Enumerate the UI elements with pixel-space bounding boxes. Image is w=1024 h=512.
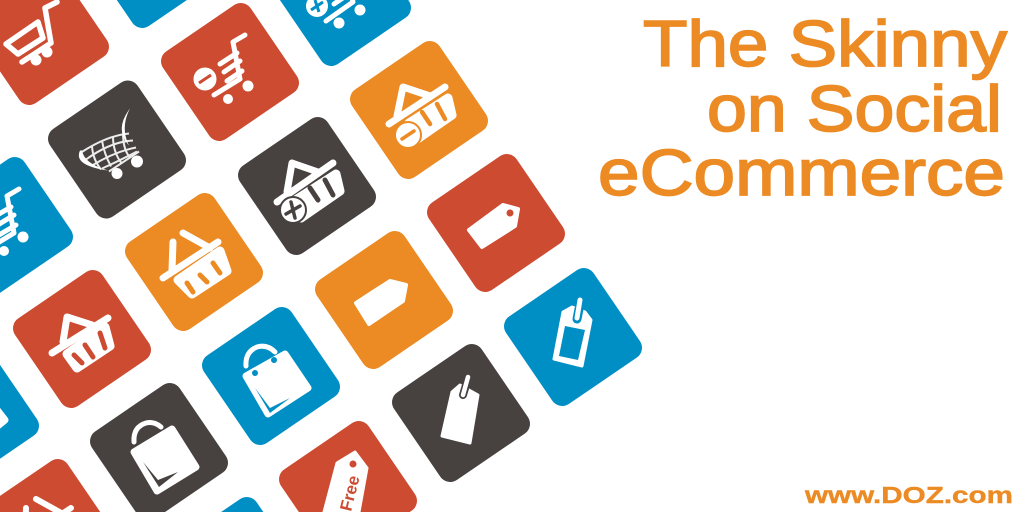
- title: The Skinny: [643, 7, 1008, 80]
- tile: red shopping cart top left: [0, 0, 114, 110]
- title: on Social: [707, 72, 1002, 145]
- tile: red price tag with hole: [422, 149, 570, 297]
- website url: www.DOZ.com: [804, 482, 1013, 508]
- tile: red basket: [8, 265, 156, 413]
- tile: blue bottom partial: [162, 492, 310, 512]
- title: [598, 7, 1008, 209]
- tile: red free tag: [274, 416, 422, 512]
- tile: orange price tag: [310, 226, 458, 374]
- tile: blue cart with plus top right: [268, 0, 416, 71]
- tile: red cart with minus: [156, 0, 304, 146]
- tile: dark tag with string: [387, 339, 535, 487]
- tile: orange basket: [120, 188, 268, 336]
- tile: dark shopping bag: [85, 378, 233, 512]
- tag label: Free: Free: [336, 474, 364, 512]
- tile: red bottom left basket: [0, 454, 121, 512]
- tile: blue bag left partial: [0, 341, 44, 489]
- tile: blue vertical tag with string: [499, 263, 647, 411]
- tile: blue shopping bag: [197, 302, 345, 450]
- tile: blue top partial: [79, 0, 227, 33]
- tile: dark mesh shopping cart: [43, 76, 191, 223]
- tile: dark basket with plus: [233, 112, 381, 260]
- tile: blue shopping cart left: [0, 152, 78, 300]
- tile: orange basket with minus: [345, 36, 493, 184]
- title: eCommerce: [598, 136, 1005, 209]
